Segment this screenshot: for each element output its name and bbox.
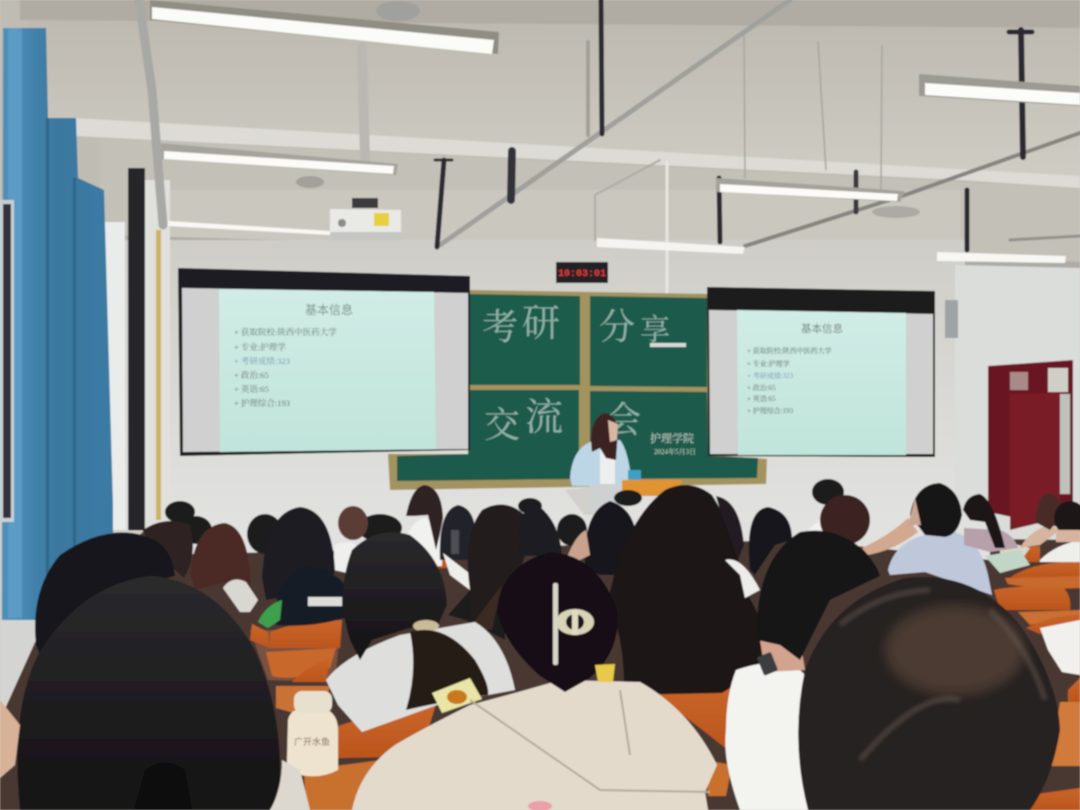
left projection screen: + 获取院校:陕西中医药大学: [234, 327, 337, 337]
white water flask: [223, 580, 258, 612]
student: brown-black hair with clip: [143, 521, 193, 578]
student: white shirt, head leaning on hand: [725, 531, 880, 810]
door: [988, 360, 1073, 530]
wall between rear row: [145, 510, 990, 560]
student: front right hair bun: [798, 577, 1060, 810]
chalk signature: 2024年5月3日: [654, 447, 696, 456]
student: white blouse with ponytail: [326, 532, 515, 732]
ceiling pipes and hanging rods: [139, 0, 1080, 345]
student: auburn with arm: [820, 495, 918, 555]
right projection screen: [707, 287, 935, 457]
chalk title: 享: [640, 314, 670, 347]
sheer curtain bottom: [0, 620, 40, 730]
hanging pull handle: [650, 343, 686, 347]
chalk signature: [650, 431, 696, 456]
digital clock: 10:03:01: [558, 269, 606, 280]
orange chair right of centre: [652, 683, 746, 750]
orange chair centre: [338, 704, 436, 758]
fluorescent light 2: [161, 143, 398, 175]
notebooks on rear desk: [985, 550, 1030, 573]
right projection screen: 基本信息: [801, 322, 843, 335]
student: long dark hair centre right: [608, 485, 768, 695]
orange desk right of centre: [705, 760, 732, 796]
floor and gaps between students: [0, 530, 1080, 810]
mobile phone: [432, 678, 482, 713]
chalk title: 流: [525, 397, 563, 439]
student: hair with claw behind: [716, 496, 760, 598]
ceiling fan left: [296, 176, 324, 188]
student: auburn hair: [190, 523, 251, 590]
student: far right white top: [1040, 501, 1080, 562]
left projection screen: + 考研成绩:323: [234, 356, 290, 366]
blackboard: [388, 290, 767, 490]
student: rear: [749, 507, 792, 575]
back wall: [105, 180, 1080, 560]
right projection screen: + 护理综合:193: [747, 406, 794, 415]
student: white sleeve right edge: [1040, 620, 1080, 675]
lectern: [565, 480, 682, 516]
student: woman holding head, upper centre: [448, 505, 528, 640]
ceiling fan top: [376, 1, 420, 21]
right projection screen: + 获取院校:陕西中医药大学: [747, 346, 832, 355]
student: rear long brown hair: [400, 485, 443, 566]
water bottle: [287, 691, 338, 776]
student: middle with hair clip, dark: [440, 505, 478, 590]
dark column beside curtain: [128, 168, 145, 530]
yellow conduit: [156, 230, 161, 520]
fluorescent light 4: [919, 74, 1080, 106]
student: far heads behind centre: [519, 503, 562, 556]
student: dark hair with backpack: [258, 507, 346, 628]
projector: [330, 198, 401, 240]
rear orange desks and chairs: [250, 540, 1080, 810]
ceiling fan right: [872, 206, 920, 218]
left projection screen: + 护理综合:193: [234, 398, 290, 408]
chalk title: 研: [522, 303, 560, 345]
chalk title: 会: [605, 400, 641, 440]
left projection screen: [178, 268, 470, 456]
white shirt rear man: [808, 512, 840, 535]
fluorescent light 5: [716, 178, 905, 202]
fluorescent light 1: [150, 0, 499, 54]
right projection screen: + 考研成绩:323: [747, 371, 794, 380]
student: far right pale top: [1020, 493, 1062, 548]
chalk title: 分: [599, 307, 635, 347]
left projection screen: + 专业:护理学: [234, 342, 286, 352]
water bottle: 广开水鱼: [294, 736, 330, 747]
fluorescent light 6: [597, 238, 745, 254]
right projection screen: + 英语:65: [747, 394, 776, 403]
digital clock: [556, 262, 608, 283]
fluorescent light 7: [937, 252, 1066, 263]
fluorescent light 3: [168, 221, 330, 235]
left projection screen: + 英语:65: [234, 384, 269, 394]
student: brown short hair: [334, 506, 368, 575]
student: rear left big hair: [35, 533, 175, 655]
wall sensor box: [945, 300, 958, 338]
chalk title: [482, 303, 670, 445]
blue curtain: [0, 28, 113, 640]
student: light blue shirt: [888, 483, 992, 595]
presenter: [570, 413, 641, 486]
student: raised arm: [568, 501, 637, 575]
chalk signature: 护理学院: [650, 431, 694, 445]
rear students small heads: [165, 479, 844, 554]
chalk title: 交: [484, 405, 520, 445]
chalk title: 考: [482, 307, 518, 347]
left projection screen: 基本信息: [305, 302, 353, 317]
student: front left dark hair: [0, 576, 310, 810]
right projection screen: + 专业:护理学: [747, 359, 790, 368]
student: ponytail right: [963, 494, 1018, 552]
front-row desk: [304, 755, 420, 810]
student: beige jacket with hair clip: [352, 552, 717, 810]
left projection screen: + 政治:65: [234, 370, 269, 380]
right projection screen: + 政治:65: [747, 383, 776, 392]
ceiling and beams: [0, 0, 1080, 290]
